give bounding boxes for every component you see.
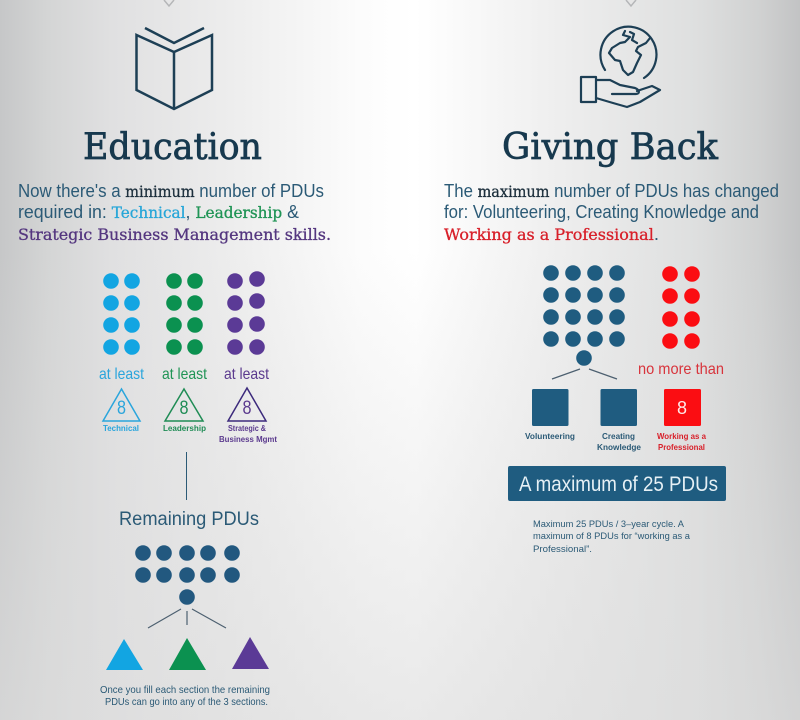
triangle 8 leadership: 8 <box>180 398 188 419</box>
top chevron left <box>164 0 174 6</box>
connector lines to squares <box>552 369 617 379</box>
connector lines to triangles <box>148 609 226 628</box>
label: at least strategic: at least <box>224 366 269 383</box>
text block: giving back intro: for: Volunteering, Creating Knowledge and <box>444 202 759 222</box>
label: Working as a Professional: Professional <box>658 442 705 452</box>
text block: maximum note: Maximum 25 PDUs / 3–year cycle. A <box>533 519 685 530</box>
label: Leadership: Leadership <box>163 423 206 433</box>
triangle: strategic <box>232 637 269 669</box>
text block: remaining note <box>100 684 270 708</box>
text block: giving back intro: Working as a Professional . <box>444 224 659 244</box>
callout: maximum of 25 PDUs: A maximum of 25 PDUs <box>519 473 718 496</box>
top chevron right <box>626 0 636 6</box>
square: working as a professional <box>664 389 701 426</box>
triangle 8 strategic <box>228 388 266 421</box>
heading: Remaining PDUs: Remaining PDUs <box>119 509 259 530</box>
text block: giving back intro: The maximum number of PDUs has changed <box>444 181 779 201</box>
dots: leadership <box>166 273 203 355</box>
label: Creating Knowledge: Knowledge <box>597 442 641 452</box>
text block: maximum note <box>533 519 691 555</box>
label: Strategic and Business Mgmt <box>219 423 277 444</box>
label: Volunteering: Volunteering <box>525 431 575 441</box>
dots: blue PDUs <box>543 265 625 366</box>
panel: Education <box>18 28 331 708</box>
triangle: leadership <box>169 638 206 670</box>
label: Creating Knowledge <box>597 431 641 452</box>
icon: open book <box>136 28 212 109</box>
dots: red PDUs <box>662 266 700 349</box>
text block: maximum note: Professional”. <box>533 544 592 555</box>
icon: hand holding globe <box>581 27 660 107</box>
triangle 8 technical: 8 <box>117 398 126 419</box>
label: Working as a Professional <box>657 431 706 452</box>
label: no more than: no more than <box>638 361 724 378</box>
text block: education intro <box>18 181 331 244</box>
square: creating knowledge <box>600 389 637 426</box>
dots: technical <box>103 273 140 355</box>
dots: strategic <box>227 271 265 355</box>
triangle 8 technical <box>103 389 140 421</box>
text block: remaining note: PDUs can go into any of the 3 sections. <box>105 696 268 708</box>
label: at least technical: at least <box>99 366 144 383</box>
text block: education intro: Strategic Business Management skills. <box>18 226 331 244</box>
dots: remaining <box>135 545 240 605</box>
triangle: technical <box>106 639 143 670</box>
label: Strategic and Business Mgmt: Strategic & <box>228 423 266 433</box>
heading: Education: Education <box>83 127 262 168</box>
callout: maximum of 25 PDUs <box>508 466 726 501</box>
label: Technical: Technical <box>103 423 139 433</box>
triangle 8 leadership <box>165 389 203 421</box>
label: Working as a Professional: Working as a <box>657 431 706 441</box>
text block: maximum note: maximum of 8 PDUs for “working as a <box>533 531 691 542</box>
triangle 8 strategic: 8 <box>242 398 252 419</box>
connector line <box>186 452 188 500</box>
heading: Giving Back: Giving Back <box>502 127 719 168</box>
label: Strategic and Business Mgmt: Business Mgmt <box>219 434 277 444</box>
text block: giving back intro <box>444 181 779 244</box>
text block: remaining note: Once you fill each section the remaining <box>100 684 270 696</box>
text block: education intro: Now there's a minimum number of PDUs <box>18 181 324 201</box>
square: working as a professional: 8 <box>677 398 687 418</box>
label: Creating Knowledge: Creating <box>602 431 635 441</box>
label: at least leadership: at least <box>162 366 207 383</box>
panel: Giving Back <box>444 27 779 555</box>
text block: education intro: required in: Technical, Leadership & <box>18 202 299 222</box>
square: volunteering <box>532 389 568 426</box>
